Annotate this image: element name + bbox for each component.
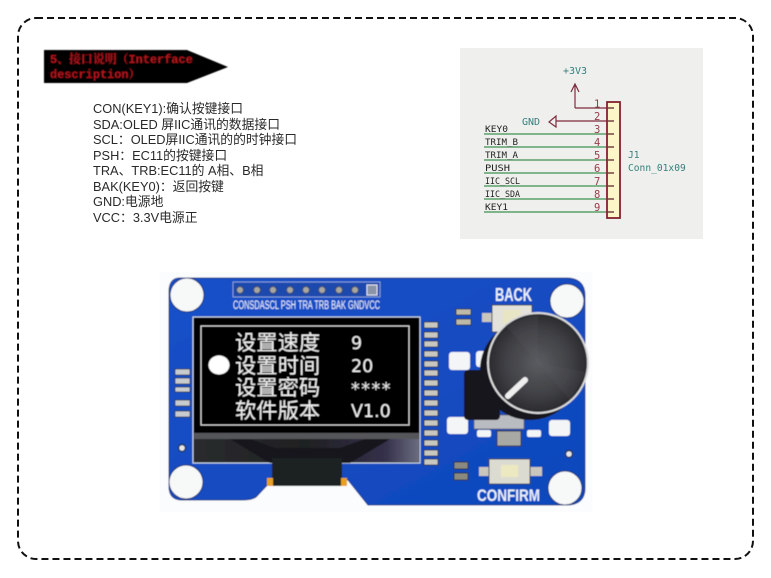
product photo: OLED module: [160, 272, 592, 512]
interface description text: PSH：EC11的按键接口: [93, 148, 227, 163]
CONFIRM button: [479, 459, 542, 484]
small via right: [566, 450, 572, 458]
net labels: PUSH: [485, 163, 510, 174]
BACK button: [482, 305, 532, 332]
connector reference: J1: [628, 150, 640, 161]
interface description text: SDA:OLED 屏IIC通讯的数据接口: [93, 117, 280, 132]
power symbol: GND: GND: [522, 117, 540, 128]
pin numbers: 9: [594, 202, 600, 214]
selection dot: [208, 356, 230, 374]
net labels: KEY0: [485, 124, 508, 135]
PCB board: [169, 278, 585, 505]
OLED screen: 20: [351, 357, 373, 377]
BACK label: BACK: [495, 285, 532, 305]
net labels: KEY1: [485, 202, 508, 213]
right component column: [424, 322, 438, 465]
interface description text: VCC：3.3V电源正: [93, 210, 198, 225]
net wires: [484, 134, 607, 212]
power symbol: +3V3: +3V3: [563, 66, 587, 77]
connector reference: Conn_01x09: [628, 163, 686, 174]
pin numbers: 8: [594, 189, 600, 201]
OLED screen: [193, 317, 420, 463]
pin numbers: 7: [594, 176, 600, 188]
pin numbers: 6: [594, 163, 600, 175]
net labels: IIC_SCL: [485, 176, 520, 187]
pin numbers: 5: [594, 150, 600, 162]
net labels: TRIM_A: [485, 150, 518, 161]
power symbol: GND: [522, 116, 607, 128]
pin numbers: 3: [594, 124, 600, 136]
small parts near CONFIRM: [454, 462, 468, 480]
interface description text: SCL：OLED屏IIC通讯的的时钟接口: [93, 132, 297, 147]
flex cable: [230, 439, 390, 486]
power symbol: +3V3: [563, 66, 607, 108]
heading banner: description）: [50, 67, 140, 82]
pin numbers: 4: [594, 137, 600, 149]
interface description text: GND:电源地: [93, 194, 164, 209]
interface description text: BAK(KEY0)：返回按键: [93, 179, 224, 194]
menu text: 设置密码: [235, 376, 320, 400]
OLED screen: V1.0: [351, 402, 391, 422]
connector reference: [628, 150, 686, 174]
menu text: [235, 331, 320, 423]
small via: [178, 444, 186, 452]
interface description text: TRA、TRB:EC11的 A相、B相: [93, 163, 263, 178]
net labels: TRIM_B: [485, 137, 518, 148]
CONFIRM label: CONFIRM: [477, 486, 540, 505]
menu text: 软件版本: [235, 399, 320, 423]
small parts near BACK: [456, 309, 471, 325]
menu text: 设置时间: [235, 354, 320, 378]
interface description text: [93, 101, 297, 225]
connector J1: [607, 102, 620, 218]
menu text: 设置速度: [235, 331, 320, 355]
left components: [175, 369, 190, 417]
mounting holes: [169, 278, 584, 505]
heading banner: 5、接口说明（Interface: [50, 52, 193, 67]
rotary encoder: [464, 313, 588, 446]
schematic panel: [460, 48, 703, 239]
pin header: [233, 282, 380, 297]
pin labels: CONSDASCL PSH TRA TRB BAK GNDVCC: [233, 300, 380, 312]
heading banner: [44, 50, 228, 83]
pin numbers: 1: [594, 98, 600, 110]
OLED screen: ****: [351, 380, 392, 400]
interface description text: CON(KEY1):确认按键接口: [93, 101, 243, 116]
pin numbers: 2: [594, 111, 600, 123]
pin numbers: [594, 98, 600, 214]
OLED screen: 9: [351, 334, 362, 354]
EC11 pads: [447, 351, 570, 437]
net labels: IIC_SDA: [485, 189, 520, 200]
net labels: [485, 124, 520, 213]
